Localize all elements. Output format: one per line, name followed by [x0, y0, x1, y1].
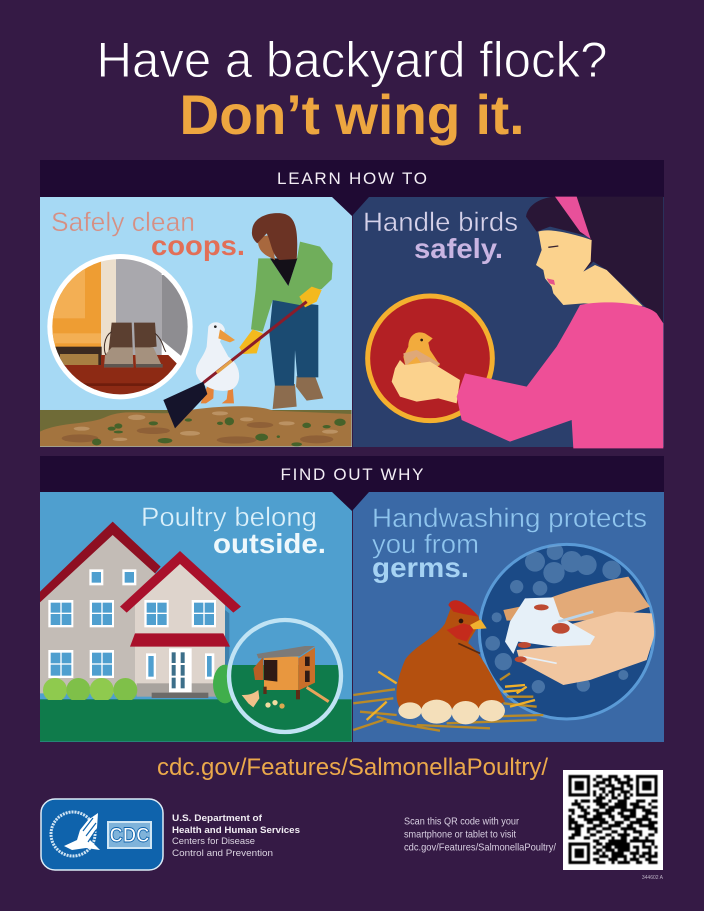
icon: HHS eagle seal [51, 812, 100, 856]
inset circle: chick [368, 296, 492, 421]
hen [396, 600, 505, 708]
qr instructions: smartphone or tablet to visit [404, 828, 516, 840]
qr instructions: Scan this QR code with your [404, 816, 519, 828]
panel: handle birds safely [353, 197, 664, 448]
heading: safely clean coops: Safely clean [51, 207, 195, 237]
panel: poultry belong outside [40, 492, 352, 742]
heading: handle birds safely: Handle birds [363, 207, 518, 237]
heading: handle birds safely: safely. [414, 233, 503, 264]
heading: handle birds safely [363, 207, 518, 264]
logo: HHS and CDC [41, 799, 163, 870]
heading: handwashing protects you from germs: you from [372, 529, 479, 559]
inset circle: chicken coop [227, 620, 343, 735]
title [96, 32, 608, 146]
section header: find out why [40, 456, 664, 492]
section header: learn how to: LEARN HOW TO [277, 169, 427, 188]
section header: find out why: FIND OUT WHY [280, 465, 424, 484]
agency name [172, 813, 300, 859]
illustration: house and coop [40, 522, 352, 742]
illustration: hen and handwashing [353, 543, 655, 731]
inset circle: washing hands [479, 543, 655, 719]
heading: safely clean coops [51, 207, 245, 261]
heading: poultry belong outside: Poultry belong [141, 502, 317, 532]
inset circle: boots at the door [47, 254, 193, 399]
straw nest [353, 672, 543, 731]
house [40, 522, 241, 698]
icon: CDC mark: CDC [110, 824, 150, 847]
notch: learn how to [332, 197, 369, 216]
website url: cdc.gov/Features/SalmonellaPoultry/ [157, 754, 548, 781]
panel: safely clean coops [40, 197, 352, 447]
shrubs [40, 665, 237, 703]
heading: poultry belong outside: outside. [213, 528, 326, 559]
illustration: woman holding chick [368, 197, 663, 448]
title: Have a backyard flock? [96, 32, 608, 88]
heading: handwashing protects you from germs: Handwashing protects [372, 503, 647, 533]
qr instructions [404, 816, 556, 854]
panel: handwashing protects you from germs [353, 492, 664, 742]
notch: find out why [332, 492, 369, 511]
heading: safely clean coops: coops. [151, 230, 245, 261]
agency name: Control and Prevention [172, 848, 273, 859]
section header: learn how to [40, 160, 664, 197]
qr instructions: cdc.gov/Features/SalmonellaPoultry/ [404, 842, 556, 854]
agency name: U.S. Department of [172, 813, 263, 824]
heading: handwashing protects you from germs [372, 503, 647, 583]
agency name: Health and Human Services [172, 825, 300, 836]
heading: poultry belong outside [141, 502, 326, 559]
heading: handwashing protects you from germs: germs. [372, 552, 469, 583]
document number: 344602 A [642, 875, 664, 881]
qr code [563, 770, 663, 870]
woman raking [163, 213, 333, 428]
illustration: coop cleaning scene [40, 213, 352, 447]
agency name: Centers for Disease [172, 836, 255, 847]
duck [196, 322, 239, 403]
eggs [398, 700, 505, 724]
soap [505, 597, 595, 654]
title: Don’t wing it. [180, 83, 524, 146]
